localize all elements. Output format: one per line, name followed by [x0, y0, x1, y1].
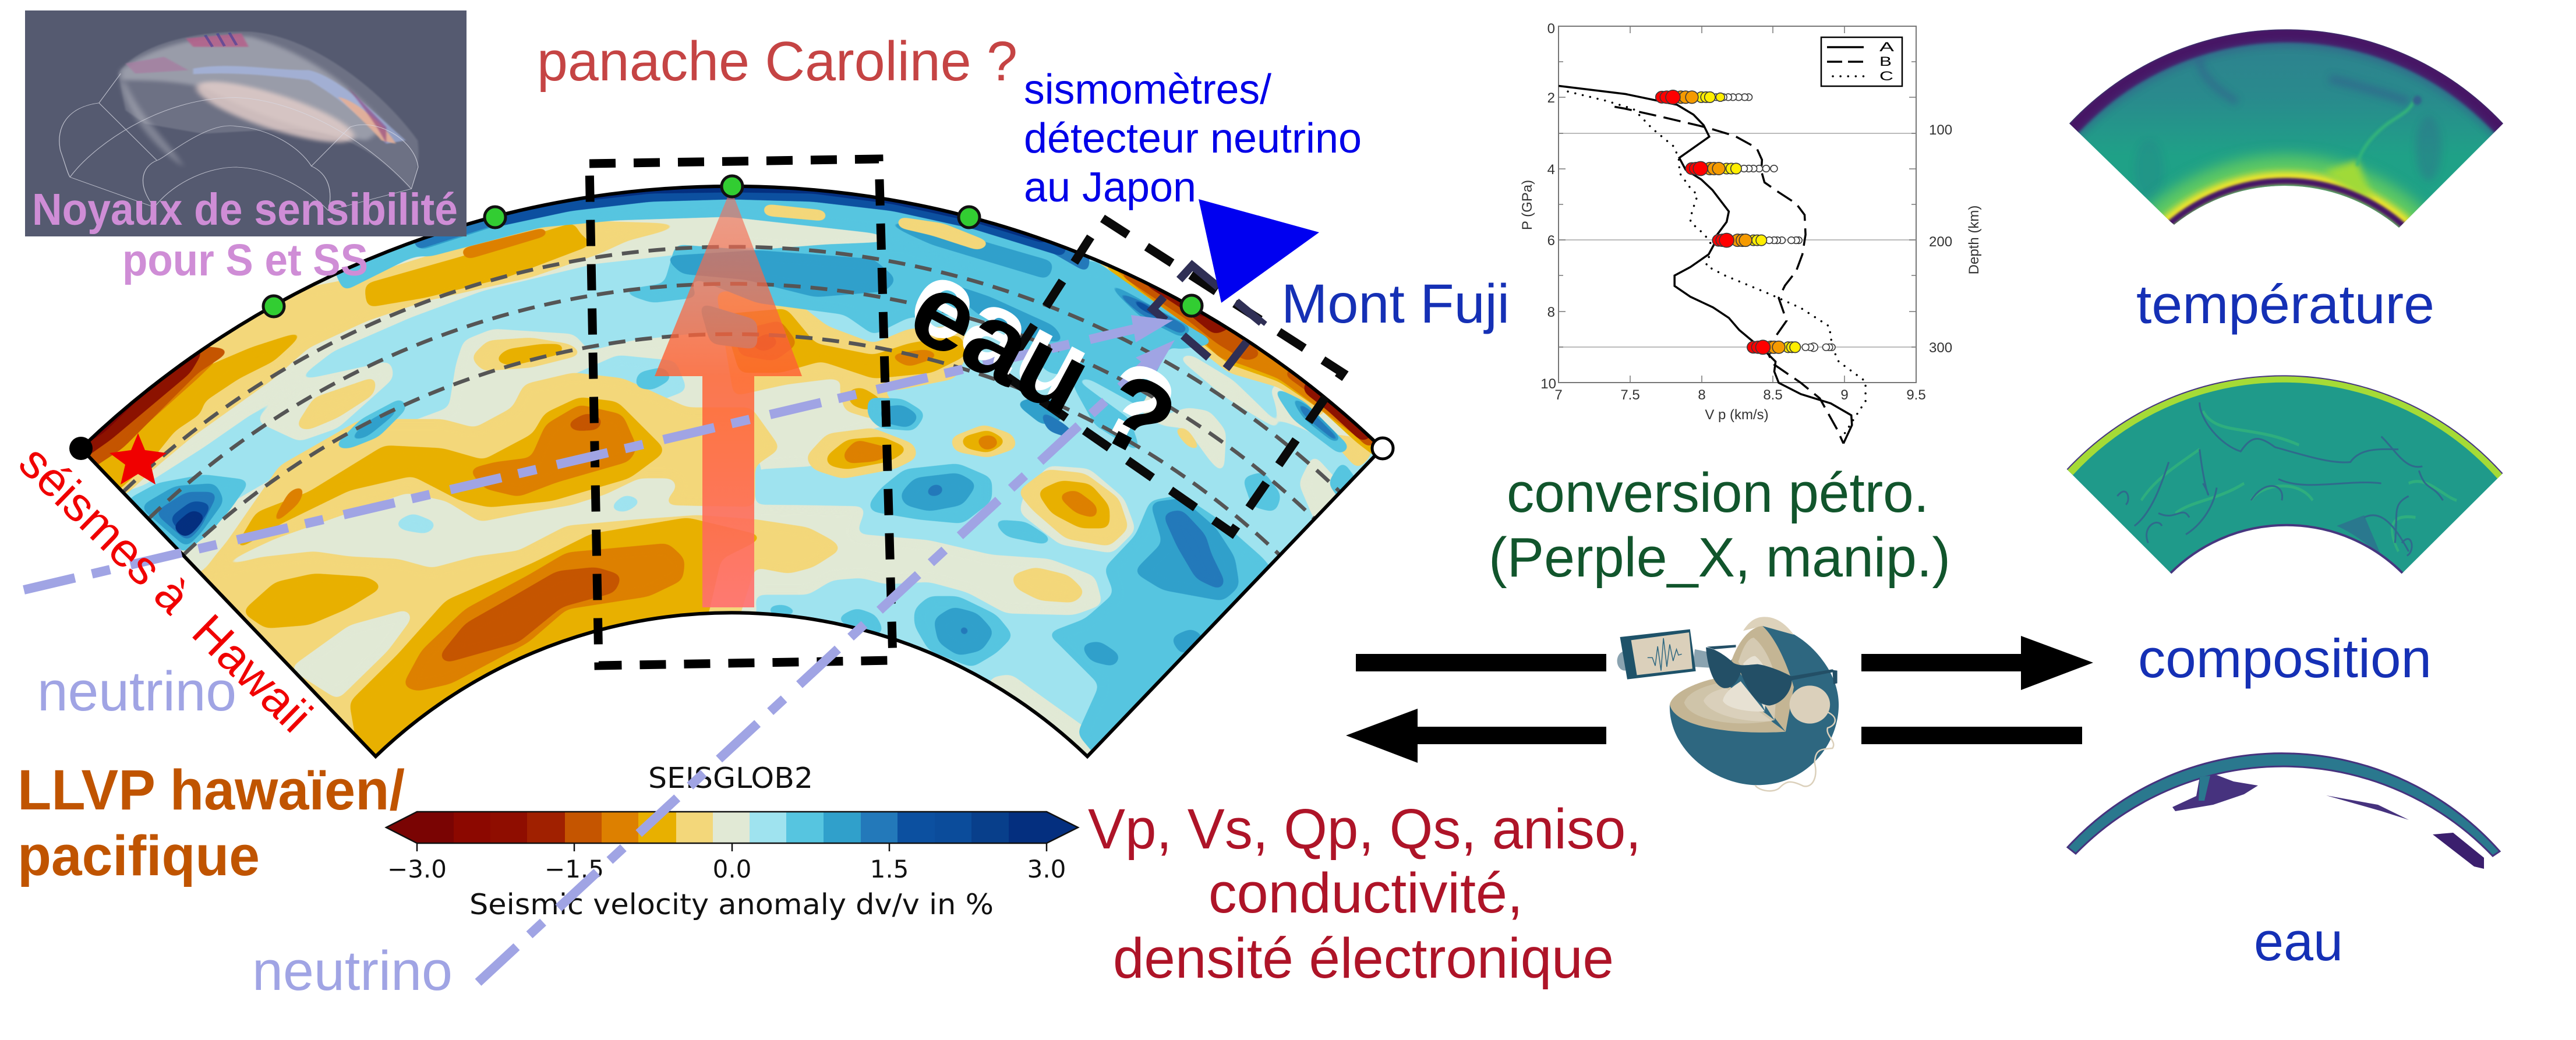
label: conversion pétro: (Perple_X, manip.) — [1489, 526, 1950, 589]
panel: water wedge — [2068, 754, 2500, 869]
arrow: backward right bar — [1861, 727, 2082, 744]
label: neutrino left: neutrino — [37, 660, 236, 723]
chart: Vp depth profile: Depth (km) — [1966, 206, 1982, 274]
label: eau ?: eau ? — [892, 249, 1194, 483]
dashed box: Mont Fuji — [1153, 266, 1262, 371]
icon: earthquake star — [109, 433, 167, 484]
label: conversion pétro: conversion pétro. — [1507, 462, 1929, 524]
label: séismes à Hawaii: séismes à Hawaii — [9, 436, 322, 742]
chart: Vp depth profile: 4 — [1547, 162, 1555, 178]
chart: Vp depth profile: 7.5 — [1620, 387, 1640, 403]
legend: A — [1879, 40, 1895, 54]
panel: temperature wedge — [2069, 29, 2503, 228]
panel: sensitivity kernels inset — [25, 10, 467, 236]
stations on the surface — [263, 176, 1202, 317]
label: Mont Fuji: Mont Fuji — [1281, 273, 1510, 335]
neutrino ray 1 — [24, 315, 1173, 590]
chart: Vp depth profile: 9.5 — [1906, 387, 1926, 403]
label: sismomètres: détecteur neutrino — [1024, 115, 1362, 162]
legend: B — [1879, 54, 1892, 69]
chart: Vp depth profile: 2 — [1547, 90, 1555, 106]
receiver dot white — [1372, 438, 1393, 459]
glasses — [1706, 645, 1838, 706]
chart: Vp depth profile: 10 — [1540, 376, 1556, 392]
label: eau: eau — [2254, 911, 2343, 972]
arrow: forward left bar — [1356, 654, 1606, 671]
label: observables: Vp, Vs, Qp, Qs, aniso, — [1088, 797, 1641, 861]
label: conversion pétro — [1489, 462, 1950, 589]
label: température: température — [2136, 274, 2434, 335]
colorbar: −3.0 — [387, 855, 447, 883]
chart: Vp depth profile: 7 — [1554, 387, 1563, 403]
label: neutrino bottom: neutrino — [252, 940, 453, 1002]
depth dashed lines — [123, 247, 1340, 555]
panel: composition wedge — [2062, 373, 2510, 576]
colorbar: Seismic velocity anomaly dv/v in % — [469, 888, 994, 921]
colorbar: 0.0 — [713, 855, 751, 883]
arrow: panache rising — [655, 189, 802, 607]
colorbar: 3.0 — [1027, 855, 1066, 883]
chart: Vp depth profile: 8 — [1698, 387, 1706, 403]
colorbar — [386, 762, 1078, 921]
chart: Vp depth profile: 9 — [1840, 387, 1849, 403]
colorbar: 1.5 — [870, 855, 909, 883]
panel: seismic tomography wedge — [87, 185, 1376, 759]
label: LLVP: pacifique — [17, 824, 260, 887]
data points at 9 GPa — [1747, 340, 1835, 354]
colorbar: −1.5 — [545, 855, 604, 883]
data points at 6 GPa — [1712, 233, 1802, 247]
legend — [1821, 37, 1902, 86]
chart: Vp depth profile: 0 — [1547, 21, 1555, 37]
neutrino ray 2 — [478, 340, 1175, 982]
dashed box: subduction region — [1003, 218, 1342, 533]
label: panache Caroline: panache Caroline ? — [537, 30, 1017, 93]
colorbar: SEISGLOB2 — [648, 762, 813, 795]
chart: Vp depth profile: P (GPa) — [1520, 180, 1535, 230]
arrow: forward right — [1861, 636, 2093, 690]
dashed box: Caroline plume — [589, 159, 893, 666]
label: composition: composition — [2138, 628, 2432, 689]
chart: Vp depth profile: 6 — [1547, 233, 1555, 249]
arrow: backward left — [1346, 709, 1606, 763]
label: observables: conductivité, — [1209, 861, 1523, 925]
chart: Vp depth profile: 8 — [1547, 305, 1555, 320]
label: eau ?: eau ? — [892, 236, 1194, 471]
label: observables — [1088, 797, 1641, 990]
chart: Vp depth profile: 200 — [1929, 234, 1952, 250]
chart: Vp depth profile: 8.5 — [1763, 387, 1783, 403]
phone — [1617, 629, 1696, 680]
chart: Vp depth profile: V p (km/s) — [1705, 407, 1769, 423]
label: sismomètres — [1024, 66, 1362, 211]
source dot black — [69, 437, 93, 460]
chart: Vp depth profile: 100 — [1929, 122, 1952, 138]
label: LLVP: LLVP hawaïen/ — [17, 758, 405, 822]
label: pour S et SS: pour S et SS — [122, 235, 368, 285]
label: Noyaux de sensibilité: Noyaux de sensibilité — [32, 185, 458, 235]
data points at 2 GPa — [1656, 90, 1752, 104]
legend: C — [1879, 69, 1893, 83]
icon: Earth with glasses and seismogram — [1617, 617, 1839, 791]
chart: Vp depth profile — [1520, 21, 1982, 444]
label: LLVP — [17, 758, 405, 887]
label: observables: densité électronique — [1113, 926, 1614, 990]
data points at 4 GPa — [1685, 161, 1778, 176]
label: sismomètres: sismomètres/ — [1024, 66, 1271, 113]
icon: seismometer triangle — [1199, 199, 1319, 303]
chart: Vp depth profile: 300 — [1929, 340, 1952, 356]
label: sismomètres: au Japon — [1024, 164, 1196, 211]
